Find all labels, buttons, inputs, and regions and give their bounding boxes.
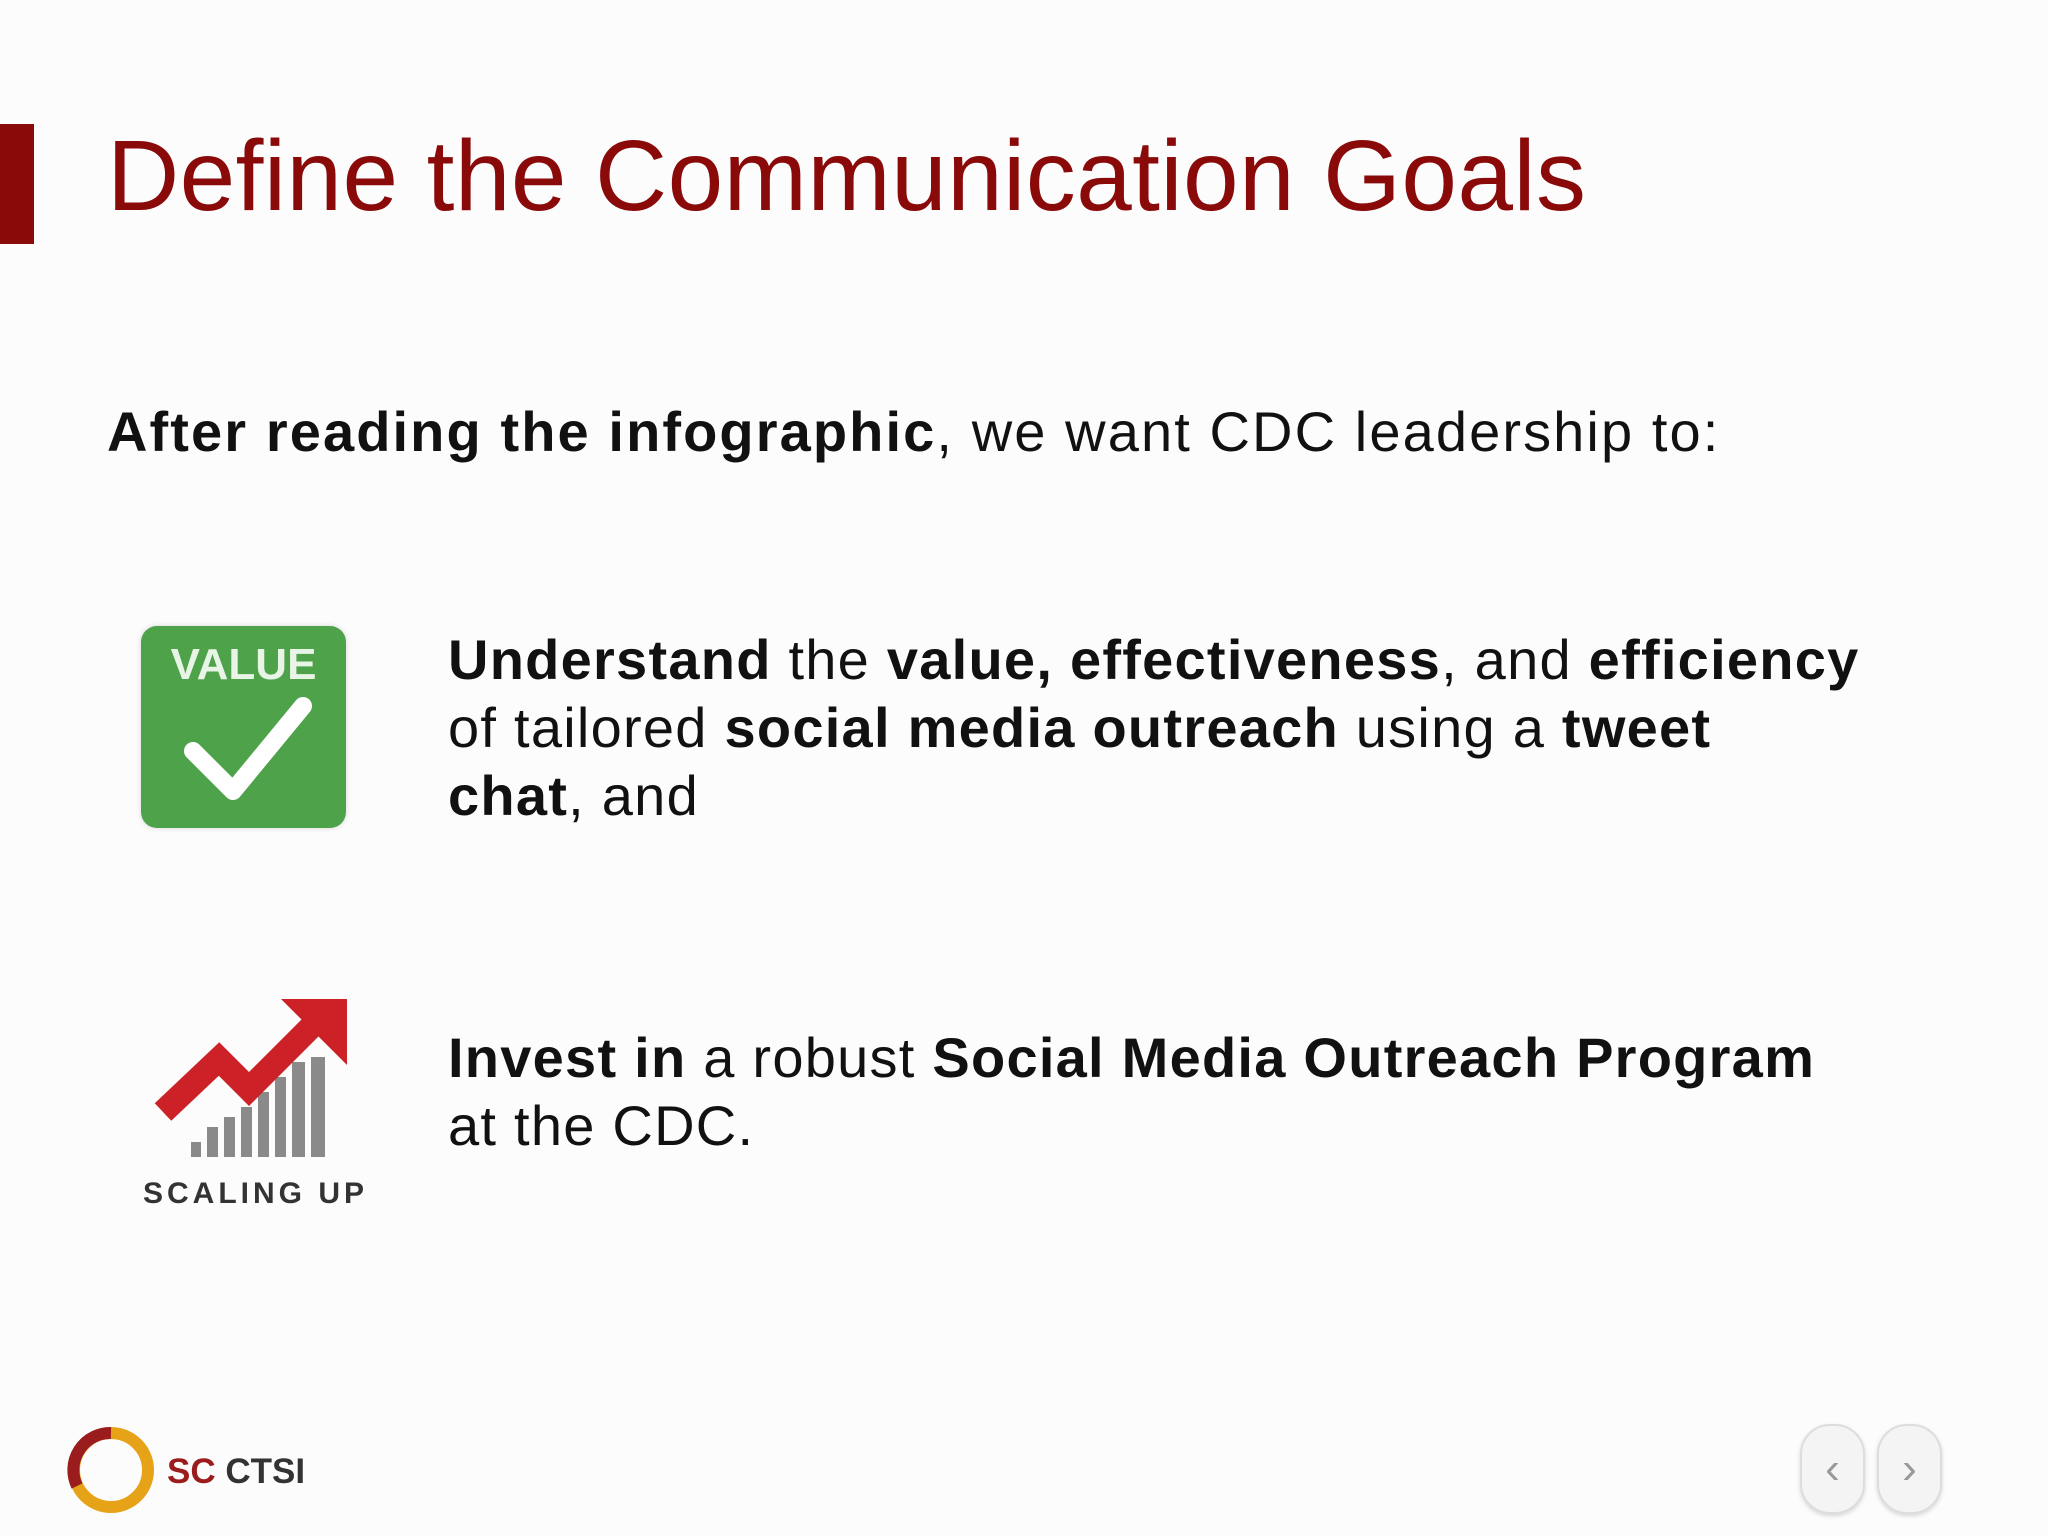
nav: next: › [1902, 1444, 1917, 1493]
text block: invest: at the CDC. [448, 1094, 754, 1157]
icon: scaling up [143, 999, 368, 1208]
text block: invest [448, 1026, 1815, 1157]
subtitle: After reading the infographic, we want CDC leadership to: [107, 400, 1720, 463]
nav: previous: ‹ [1825, 1444, 1840, 1493]
text block: understand value: of tailored social media outreach using a tweet [448, 696, 1711, 759]
text block: understand value [448, 628, 1860, 827]
nav: next [1877, 1424, 1942, 1514]
nav: previous [1800, 1424, 1865, 1514]
logo: SC CTSI: SC CTSI [167, 1452, 305, 1491]
logo: SC CTSI [67, 1427, 305, 1513]
title: Define the Communication Goals [107, 120, 1586, 232]
icon: value checkmark: VALUE [171, 640, 316, 689]
accent bar [0, 124, 34, 244]
text block: understand value: chat, and [448, 764, 699, 827]
text block: understand value: Understand the value, effectiveness, and efficiency [448, 628, 1860, 691]
icon: value checkmark [141, 626, 346, 828]
text block: invest: Invest in a robust Social Media Outreach Program [448, 1026, 1815, 1089]
